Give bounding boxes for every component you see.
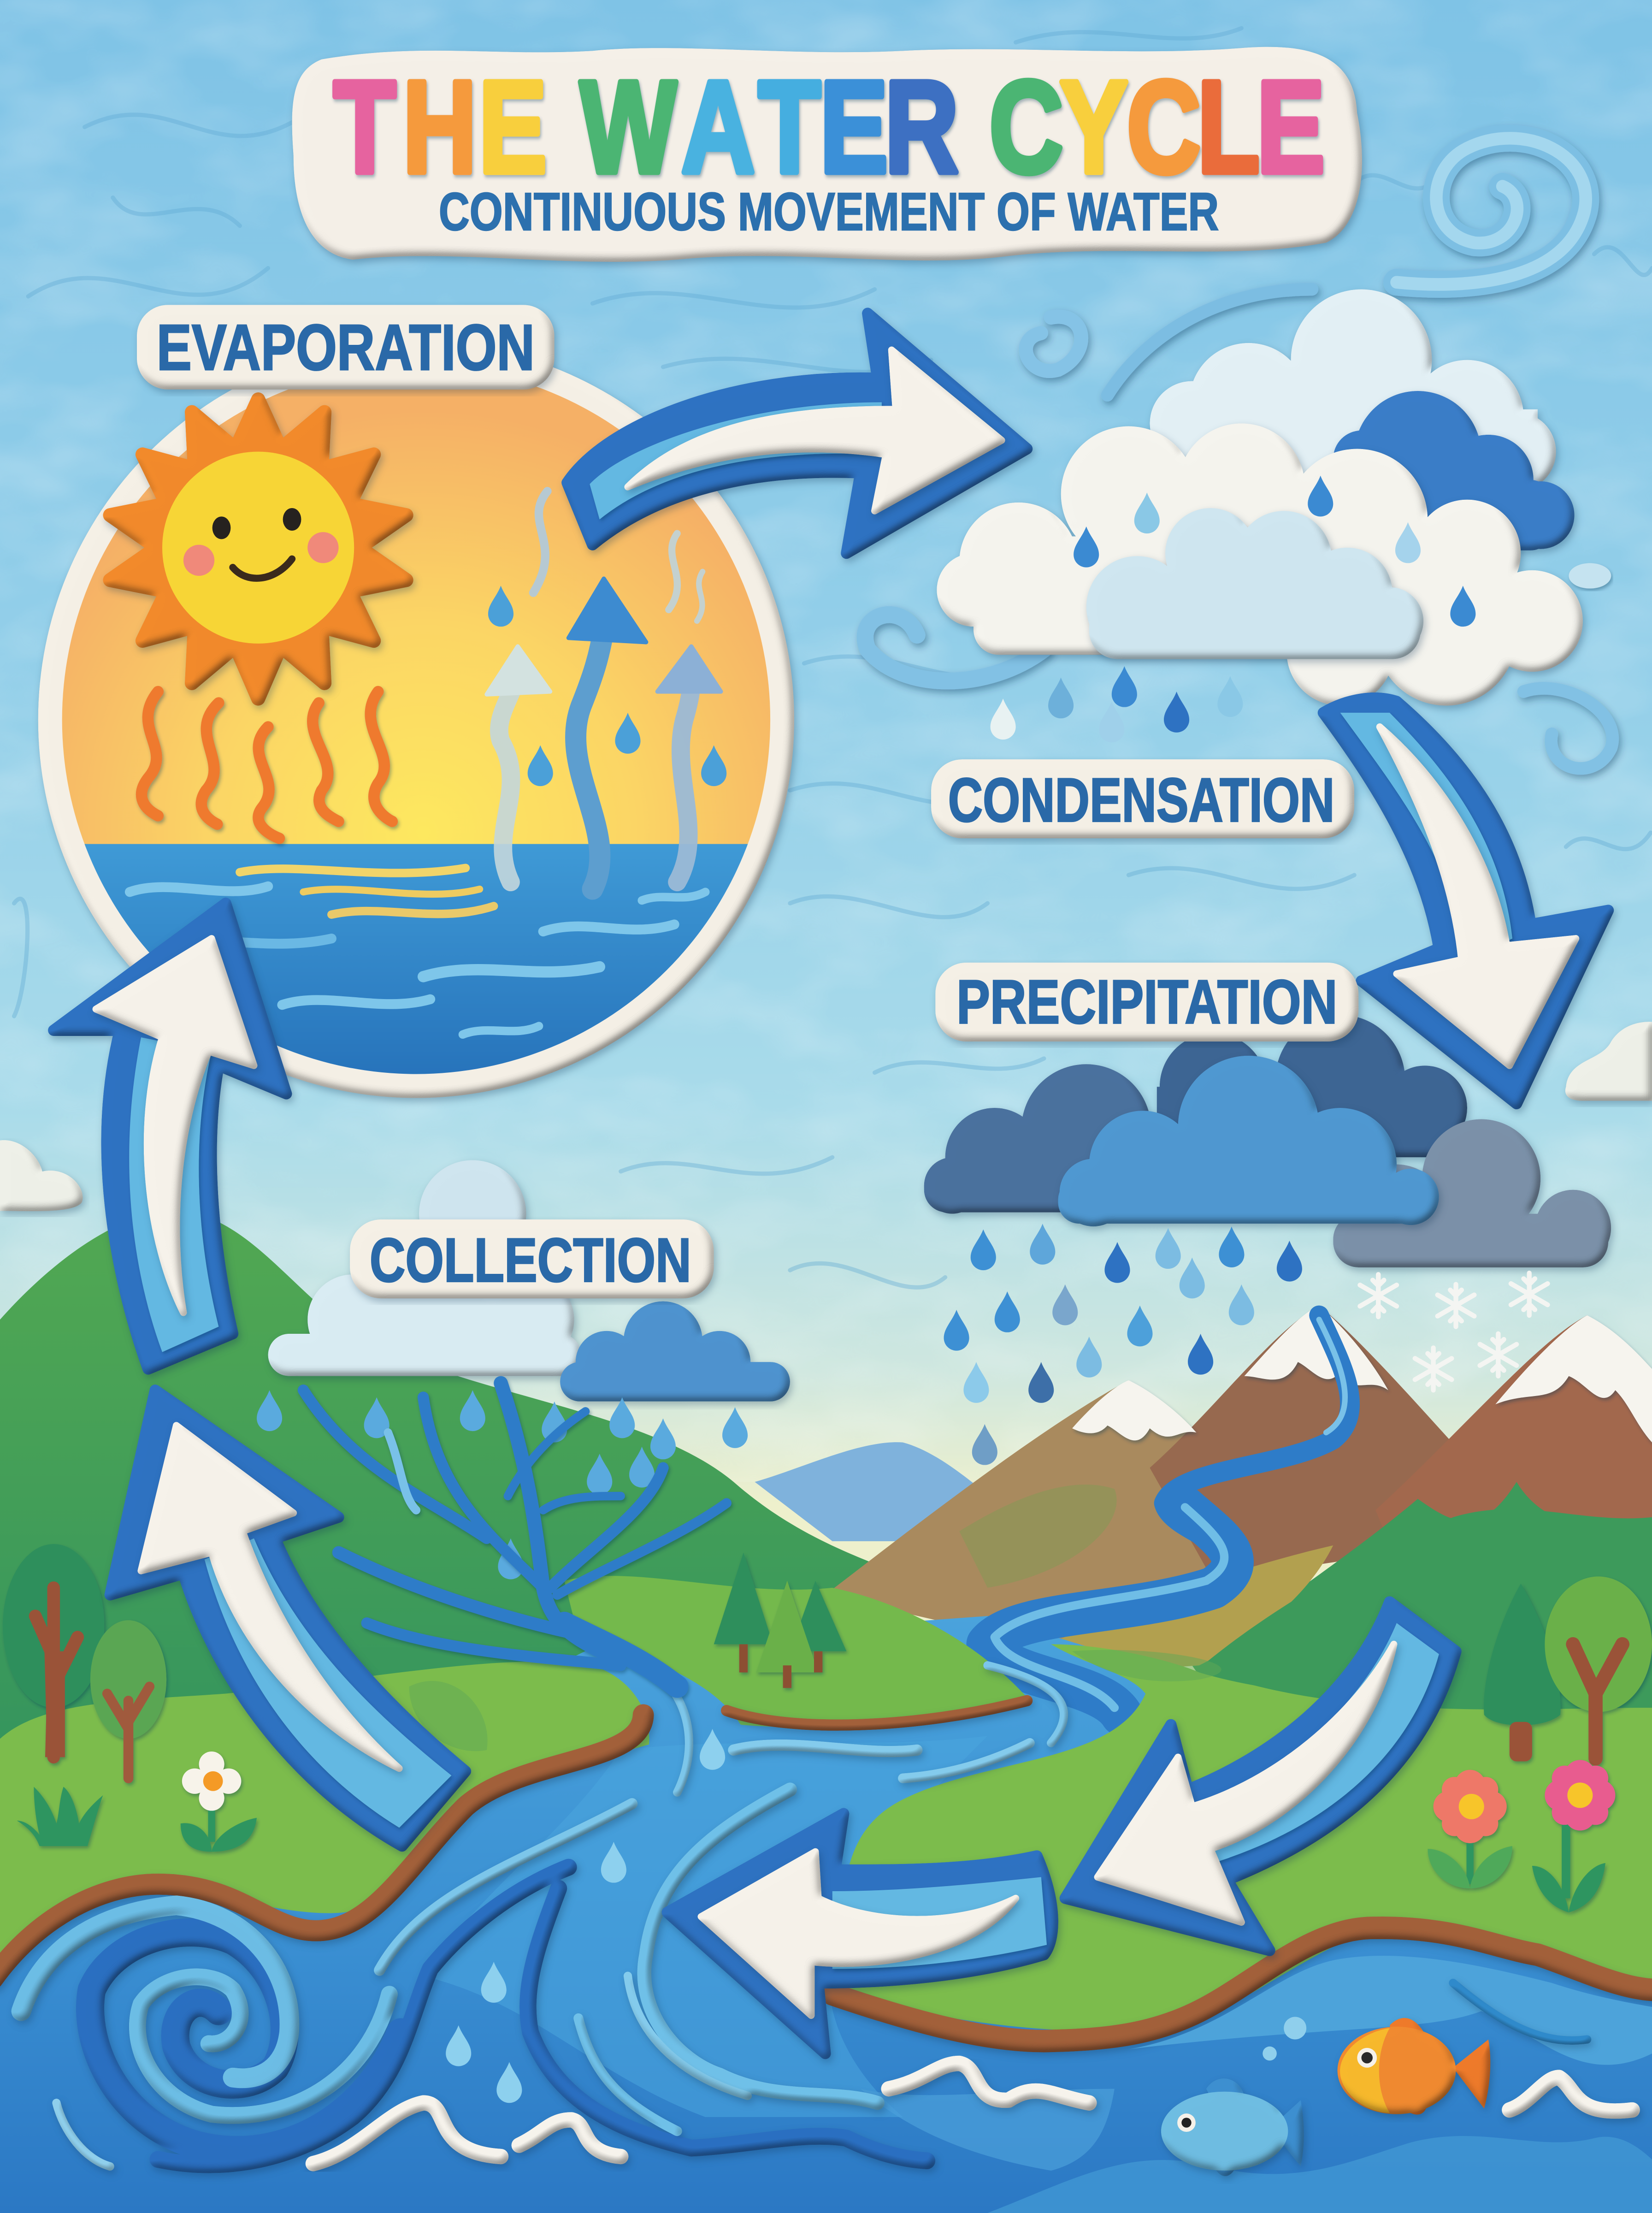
main title: H	[403, 54, 477, 201]
distant cloud left	[0, 1140, 83, 1211]
right flowers	[1428, 1760, 1615, 1912]
meadow left	[0, 1662, 649, 1979]
main title: R	[885, 54, 987, 201]
clay background mottling	[0, 0, 1652, 1482]
main title: L	[1197, 54, 1260, 201]
main title: C	[1127, 54, 1201, 201]
cloud droplets	[991, 476, 1475, 742]
arrow: river flowing left	[667, 1814, 1053, 2053]
vapour droplets	[488, 586, 726, 786]
right green hill band	[1199, 1509, 1652, 1710]
clay background texture	[14, 28, 1652, 1287]
water body: river and ocean	[0, 1616, 1652, 2213]
snowflakes	[1360, 1273, 1548, 1390]
sun icon	[110, 399, 406, 698]
orange fish	[1337, 2018, 1490, 2115]
blue front cloud	[1058, 1056, 1439, 1226]
swirl and river streaks	[21, 1665, 1587, 2166]
right bank	[832, 1644, 1652, 2030]
rain drops	[944, 1224, 1302, 1465]
river droplets	[446, 1729, 725, 2103]
big dark stream two	[528, 1888, 927, 2161]
spiral dark	[90, 1932, 401, 2150]
spiral outer light	[21, 1905, 289, 2078]
main title: T	[333, 54, 396, 201]
tan foot hill	[1051, 1545, 1333, 1673]
main title: Y	[1060, 54, 1128, 201]
grey right cloud	[1333, 1119, 1611, 1267]
evaporation label: EVAPORATION	[157, 311, 535, 384]
inner pale blue cloud	[1086, 508, 1423, 659]
condensation cloud group	[937, 290, 1611, 742]
blue fish	[1161, 2078, 1304, 2176]
green left hill	[0, 1211, 889, 1863]
blue cloud	[560, 1301, 790, 1402]
right green slope	[1192, 1482, 1652, 1778]
snow caps	[1072, 1306, 1652, 1443]
branching streams	[303, 1383, 726, 1686]
mountain left	[825, 1380, 1326, 1651]
dark back cloud	[1157, 1015, 1467, 1157]
grass tuft	[17, 1787, 103, 1846]
meadow shading	[409, 1650, 1221, 1751]
arrow: evaporation to condensation	[567, 314, 1027, 553]
dark blue cloud	[1333, 391, 1575, 550]
main title: A	[681, 54, 755, 201]
rising vapour arrows	[487, 491, 721, 889]
subtitle: CONTINUOUS MOVEMENT OF WATER	[439, 182, 1219, 242]
distant cloud right	[1565, 1022, 1652, 1101]
tree icons left	[3, 1544, 166, 1778]
red flower	[1428, 1770, 1512, 1888]
brown river banks	[0, 1701, 1652, 2041]
rain cloud group	[924, 1015, 1611, 1465]
distant blue hill	[755, 1442, 1044, 1541]
main title: E	[820, 54, 888, 201]
plaque shape	[292, 47, 1362, 262]
main title: E	[478, 54, 575, 201]
right trees	[1484, 1576, 1652, 1761]
disc sky and sea	[56, 360, 776, 1084]
ocean lower waves	[987, 2136, 1652, 2213]
pine trees	[714, 1552, 846, 1688]
white waves	[313, 2064, 1632, 2164]
main title: C	[989, 54, 1063, 201]
lighter river channel	[423, 1736, 987, 2117]
decorative swirls	[865, 138, 1612, 769]
disc frame	[38, 342, 794, 1098]
precipitation label: PRECIPITATION	[956, 967, 1337, 1036]
collection label: COLLECTION	[370, 1225, 691, 1295]
main title: W	[580, 54, 677, 201]
mountain river	[980, 1315, 1350, 1715]
big dark stream one	[158, 1867, 568, 2165]
bubbles	[1263, 2017, 1306, 2060]
pale back cloud	[1150, 290, 1556, 494]
background landscape	[0, 1211, 1652, 1863]
main white cloud	[937, 423, 1583, 706]
mountain centre	[1150, 1306, 1456, 1581]
mountain right	[1375, 1315, 1652, 1595]
spiral inner light	[137, 1977, 389, 2115]
flower: daisy	[181, 1751, 257, 1852]
arrow: condensation to precipitation	[1323, 698, 1608, 1104]
olive patch	[959, 1485, 1117, 1588]
condensation label: CONDENSATION	[948, 765, 1334, 835]
pale cloud	[268, 1160, 581, 1376]
collection clouds	[257, 1160, 790, 1580]
island centre	[564, 1576, 1030, 1727]
light streams	[379, 1804, 632, 1970]
arrow: collection up to hill	[110, 1390, 466, 1846]
main title: E	[1257, 54, 1325, 201]
small cloud bead	[1569, 563, 1611, 589]
collection droplets	[257, 1390, 748, 1580]
panel: evaporation disc	[38, 342, 794, 1098]
arrow: collection to evaporation, upper left	[53, 903, 286, 1369]
ocean lagoon lower right	[1129, 1956, 1652, 2065]
arrow: river flowing down-left	[1065, 1602, 1456, 1951]
pink flower	[1532, 1760, 1615, 1912]
heat waves	[142, 692, 392, 838]
title plaque	[292, 47, 1362, 262]
main title: T	[758, 54, 820, 201]
slate left cloud	[924, 1064, 1178, 1214]
